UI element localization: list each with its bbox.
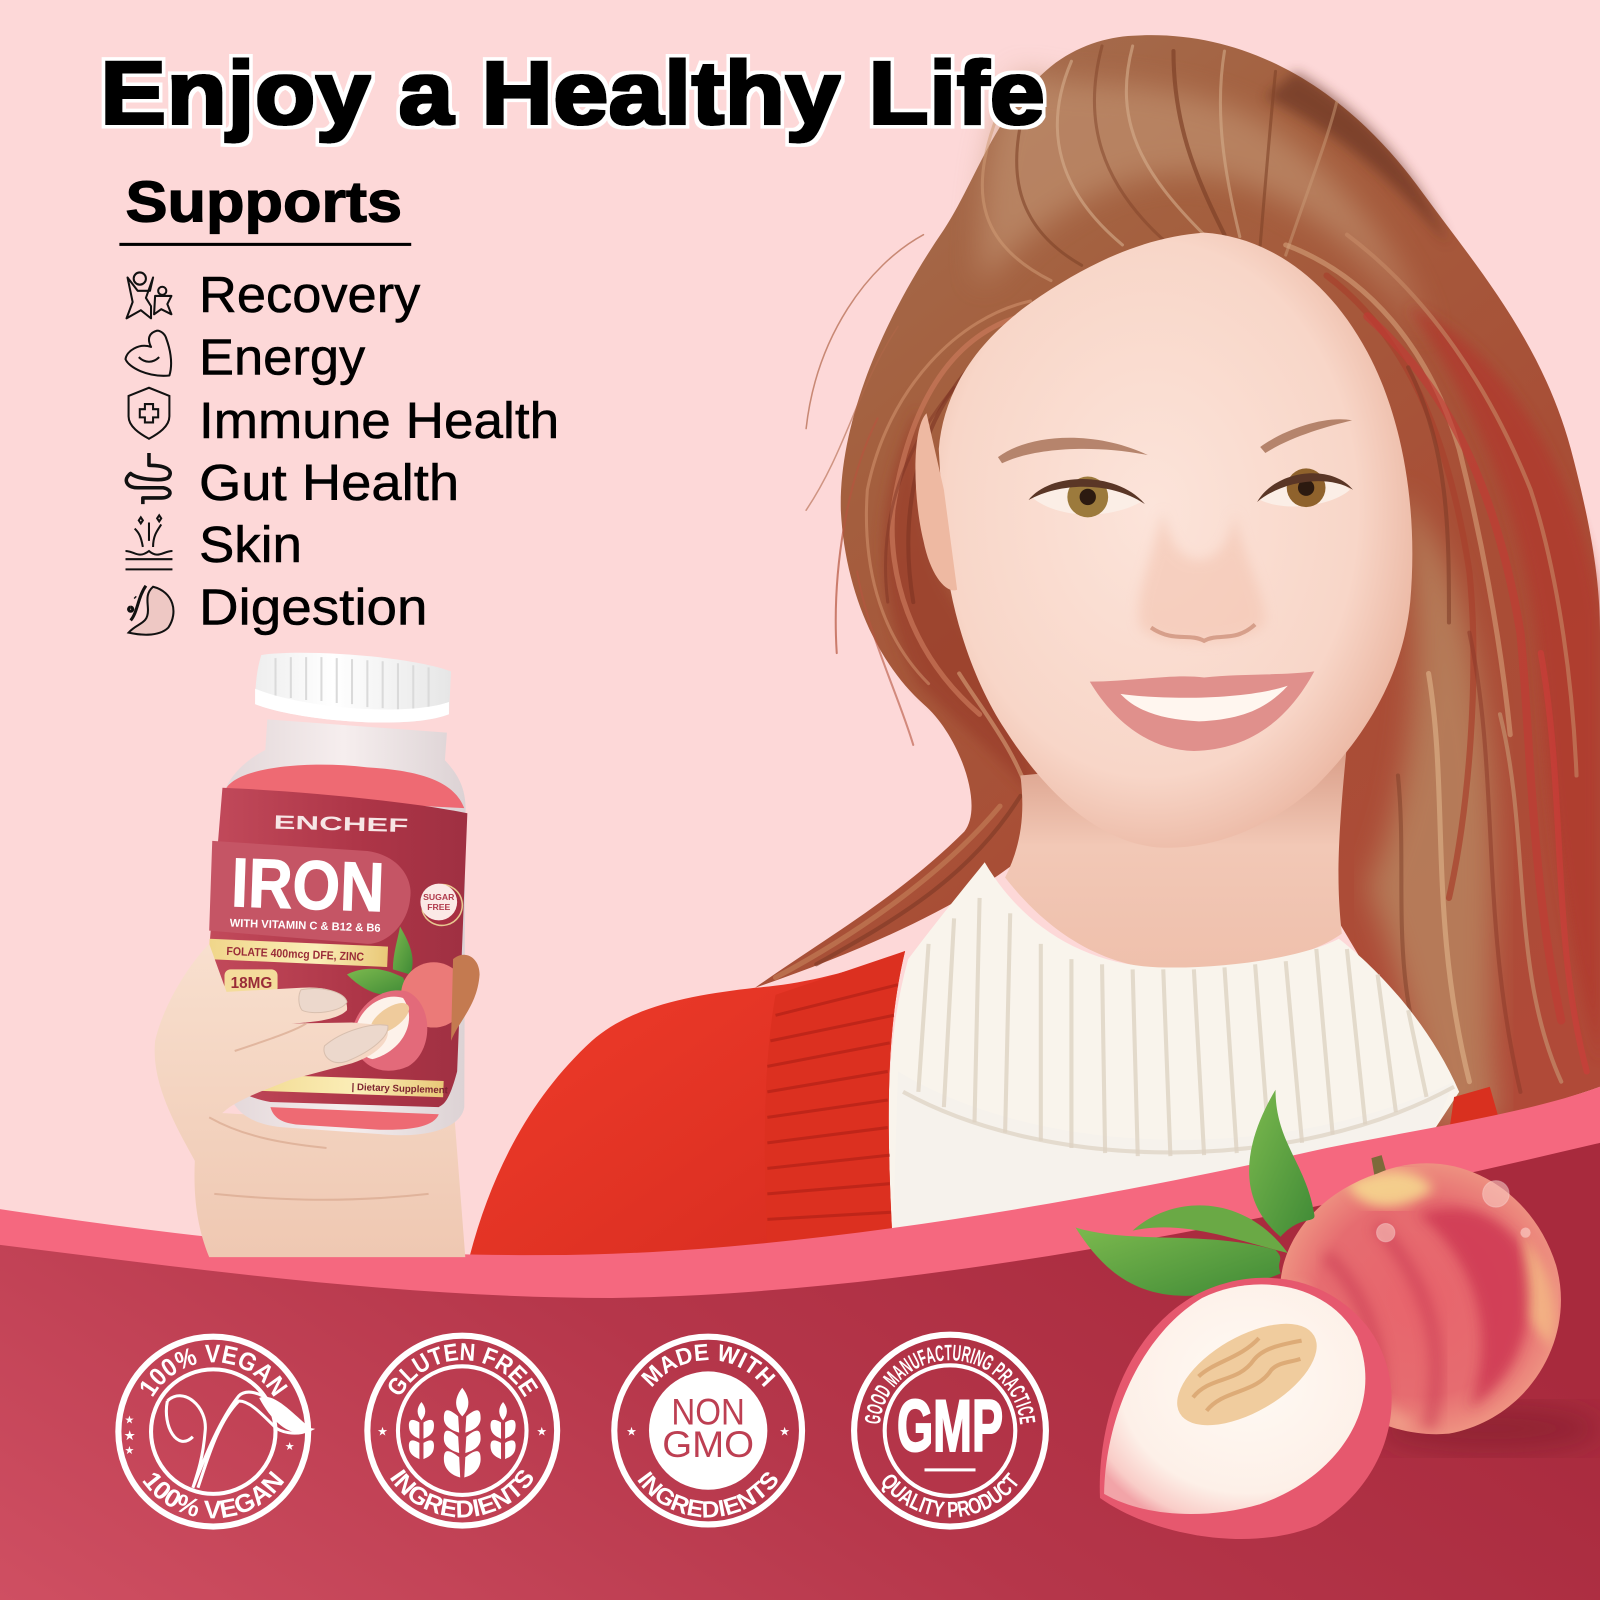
hair mass: [755, 35, 1600, 1133]
icon: stomach: [129, 586, 173, 635]
face: [915, 233, 1412, 848]
badge: gluten free: [364, 1332, 560, 1529]
badge: 100% vegan: ★: [285, 1441, 295, 1453]
icon: flexed arm: [126, 331, 171, 376]
row: Skin: [126, 515, 302, 573]
whole peach: [1280, 1163, 1561, 1434]
row: Immune Health: Immune Health: [199, 392, 559, 449]
bottle label: [209, 788, 467, 1107]
badge: non GMO: ★: [626, 1425, 637, 1439]
row: Recovery: Recovery: [199, 266, 421, 323]
fingernails: [299, 989, 388, 1063]
badge: gluten free: ★: [377, 1425, 388, 1439]
brand: ENCHEF: [273, 812, 409, 837]
badge: non GMO: [611, 1334, 806, 1528]
icon: shield with cross: [129, 388, 169, 439]
badges: [115, 1332, 1049, 1530]
bottom strip: | Dietary Supplement: [351, 1082, 449, 1096]
badge: 100% vegan: 100% VEGAN: [142, 1470, 284, 1518]
badge: GMP: [851, 1332, 1049, 1530]
badge: non GMO: GMO: [662, 1424, 754, 1465]
sugar free badge: [420, 884, 462, 925]
row: Digestion: Digestion: [199, 578, 428, 635]
label peach: [347, 927, 466, 1071]
icon: skin layers: [126, 515, 172, 569]
title: Enjoy a Healthy Life: [100, 43, 1045, 142]
badge: gluten free: INGREDIENTS: [390, 1469, 533, 1518]
heading: Supports: Supports: [126, 170, 402, 234]
badge: GMP: GOOD MANUFACTURING PRACTICE: [864, 1344, 1036, 1424]
peach shadow: [1378, 1404, 1600, 1453]
sweater: white turtleneck: [889, 862, 1459, 1237]
wheat icon: [409, 1388, 516, 1478]
cardigan: red: [467, 951, 1500, 1265]
icon: intestine: [126, 453, 170, 504]
badge: 100% vegan: ★: [125, 1414, 135, 1426]
hand fingers: [155, 944, 429, 1200]
badge: GMP: GMP: [897, 1384, 1003, 1467]
badge: GMP: QUALITY PRODUCT: [882, 1472, 1018, 1518]
leaves: [1076, 1090, 1314, 1296]
vegan V with leaf: [166, 1392, 310, 1488]
sugar free badge: SUGAR: [423, 892, 455, 902]
heading underline: [119, 243, 411, 246]
mouth: [1090, 671, 1314, 751]
badge: 100% vegan: ★: [124, 1428, 136, 1443]
badge: 100% vegan: 100% VEGAN: [140, 1344, 288, 1397]
row: Gut Health: Gut Health: [199, 454, 459, 511]
gummy held by fingers: [451, 955, 480, 1041]
half peach: [1100, 1278, 1392, 1539]
dose chip: [224, 969, 278, 994]
gummies: [222, 765, 464, 1130]
badge: non GMO: ★: [779, 1425, 790, 1439]
row: Skin: Skin: [199, 516, 302, 573]
bottom strip: [229, 1073, 449, 1097]
band: dark red wave: [0, 1143, 1600, 1600]
folate strip: [209, 939, 388, 967]
folate strip: FOLATE 400mcg DFE, ZINC: [226, 945, 365, 964]
band: pink wave: [0, 1087, 1600, 1600]
peaches: fruit illustration: [1076, 1090, 1600, 1539]
badge: non GMO: MADE WITH: [640, 1344, 776, 1387]
row: Energy: Energy: [199, 328, 366, 385]
row: Energy: [126, 328, 366, 385]
sugar free badge: FREE: [427, 902, 451, 912]
neck: [1005, 745, 1347, 969]
benefits list: [126, 266, 559, 635]
badge: gluten free: GLUTEN FREE: [388, 1343, 538, 1398]
product: bottle held in hand: [155, 653, 480, 1257]
badge: 100% vegan: [115, 1334, 316, 1530]
icon: people jumping: [127, 272, 171, 318]
photo: smiling woman: [467, 35, 1600, 1265]
nose: [1139, 510, 1265, 642]
dose chip: 18MG: [231, 975, 272, 992]
badge: non GMO: NON: [671, 1391, 745, 1432]
eye: left: [1029, 477, 1145, 517]
eye: right: [1257, 468, 1353, 507]
bottle cap: [255, 653, 451, 723]
bottle body: [221, 719, 466, 1135]
eyebrows: [998, 419, 1352, 463]
badge: non GMO: INGREDIENTS: [638, 1471, 778, 1518]
hand back: [194, 1112, 465, 1257]
badge: 100% vegan: ★: [125, 1445, 135, 1457]
product name: IRON: [230, 843, 386, 926]
peach stem: [1371, 1155, 1392, 1194]
badge: gluten free: ★: [536, 1425, 547, 1439]
subtitle: WITH VITAMIN C & B12 & B6: [229, 918, 381, 935]
